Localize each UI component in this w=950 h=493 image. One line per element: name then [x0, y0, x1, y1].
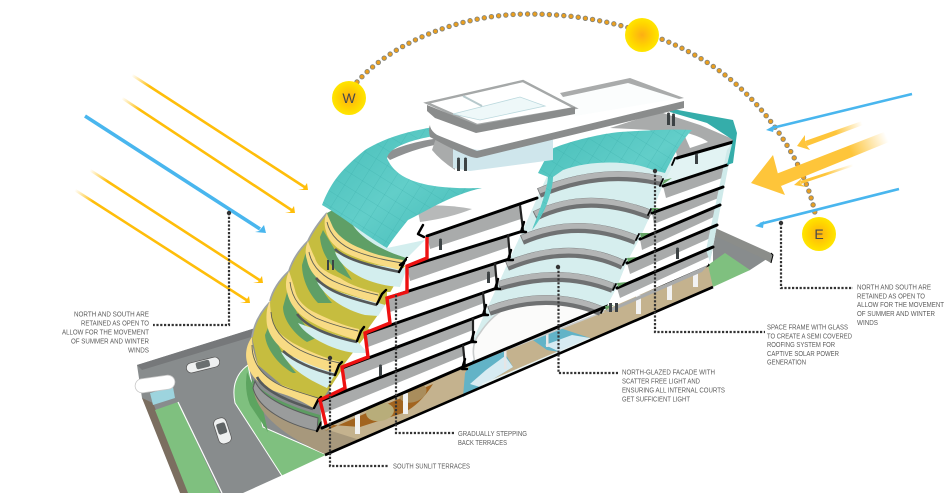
callout: east winds text: RETAINED AS OPEN TO [857, 294, 925, 300]
red stepped section line [320, 237, 427, 425]
callout: south sunlit terraces: SOUTH SUNLIT TERRACES [393, 464, 470, 470]
callout: north-glazed facade: SCATTER FREE LIGHT AND [622, 378, 700, 386]
callout: gradually stepping back terraces: GRADUALLY STEPPING [458, 431, 527, 438]
leader: east wind [779, 221, 853, 288]
icon: car on road bottom [212, 416, 233, 445]
terrace tier 3 [286, 241, 390, 342]
callout: north-glazed facade: GET SUFFICIENT LIGHT [622, 396, 691, 404]
terrace tier 2 [306, 213, 407, 305]
icon: car on road top [185, 356, 221, 374]
callout: space frame roof: CAPTIVE SOLAR POWER [767, 351, 839, 358]
arrows: east sun rays and wind [751, 94, 912, 228]
callout: east winds text: WINDS [857, 320, 878, 327]
callout: space frame roof: TO CREATE A SEMI COVERED [767, 334, 852, 340]
leader: south sunlit terraces [328, 356, 388, 466]
site plate: ground, road and lawns [137, 227, 773, 493]
leader: stepping terraces [396, 295, 455, 433]
teal glass space-frame roof, centre [532, 130, 692, 230]
terrace end ticks [314, 225, 424, 431]
terrace tier 4 [266, 271, 370, 375]
callout: gradually stepping back terraces: BACK TERRACES [458, 440, 507, 447]
callout: east winds text: OF SUMMER AND WINTER [857, 311, 935, 318]
glass base ring [252, 378, 322, 431]
teal glass space-frame roof, left [322, 126, 482, 248]
callout: east winds text: NORTH AND SOUTH ARE [857, 284, 931, 292]
figures on roof [457, 112, 675, 171]
callout: west winds text: WINDS [128, 348, 149, 354]
callout: east winds text [857, 284, 945, 327]
icon: west sun [332, 81, 366, 115]
callout: north-glazed facade: ENSURING ALL INTERNAL COURTS [622, 388, 725, 394]
terrace tier 1 [325, 205, 425, 272]
rooftop terrace plane [384, 112, 735, 228]
callout: west winds text: OF SUMMER AND WINTER [71, 338, 149, 346]
penthouse block [427, 78, 684, 171]
teal glass roof edge, right [667, 108, 737, 165]
sun path: dotted arc [357, 14, 815, 213]
icon: midday sun [625, 18, 659, 52]
north-glazed courtyard facade with curved balconies [473, 158, 677, 362]
callout: north-glazed facade: NORTH-GLAZED FACADE WITH [622, 370, 715, 376]
callout: west winds text: RETAINED AS OPEN TO [81, 320, 149, 328]
bus shelter [134, 374, 176, 405]
icon: east sun: E [814, 226, 824, 242]
ground level: stone paving, courtyard and water [253, 265, 713, 455]
leader: north-glazed facade [556, 265, 618, 373]
left stepped terraces [246, 205, 425, 409]
figures inside floors [327, 154, 698, 376]
leader: west wind [153, 211, 231, 325]
callout: west winds text: ALLOW FOR THE MOVEMENT [62, 330, 150, 336]
callout: west winds text: NORTH AND SOUTH ARE [74, 312, 149, 318]
callout: space frame roof: GENERATION [767, 360, 806, 366]
callout: space frame roof: ROOFING SYSTEM FOR [767, 342, 835, 349]
callout: west winds text [62, 312, 150, 354]
callout: space frame roof: SPACE FRAME WITH GLASS [767, 324, 848, 332]
arrows: west sun rays and wind [75, 75, 308, 303]
leader: space frame [653, 169, 765, 332]
left wing floor slabs [320, 198, 537, 428]
icon: east sun [802, 217, 836, 251]
ground front edge [325, 287, 713, 455]
callout: gradually stepping back terraces [458, 431, 527, 447]
icon: west sun: W [342, 90, 356, 106]
callout: space frame roof [767, 324, 852, 366]
callout: north-glazed facade [622, 370, 725, 404]
terrace tier 5 [246, 302, 345, 409]
right wing floor slabs [601, 142, 733, 313]
first-floor line [322, 265, 708, 428]
